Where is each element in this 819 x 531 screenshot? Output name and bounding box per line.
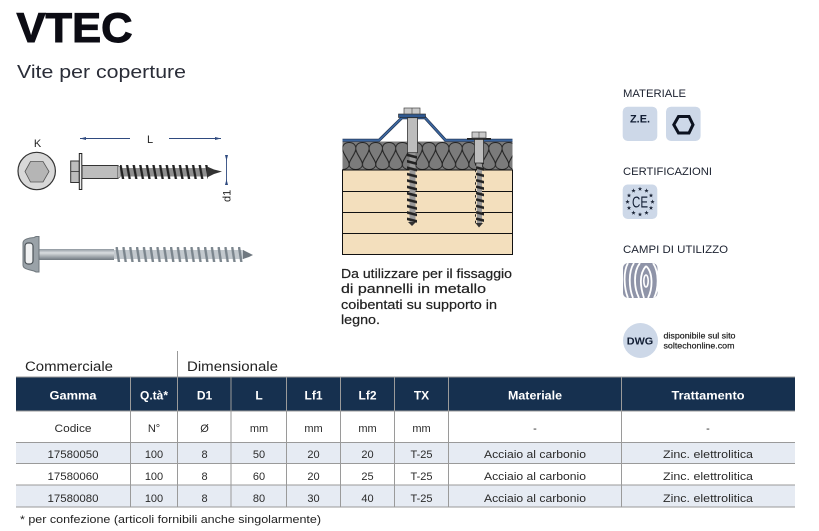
table header: Materiale (508, 388, 562, 402)
screw photo (23, 236, 253, 272)
row 17580080: 100 (145, 493, 163, 505)
row 17580060: T-25 (410, 471, 433, 483)
footnote: * per confezione (articoli fornibili anche singolarmente) (20, 514, 321, 526)
icon: CE with stars: CE (632, 194, 648, 212)
description text: Da utilizzare per il fissaggio (341, 267, 512, 281)
units row: Ø (200, 423, 209, 435)
table section headings (25, 351, 278, 377)
row 17580060: 25 (361, 471, 374, 483)
row 17580060: 8 (201, 471, 208, 483)
icon: hexagon (666, 107, 701, 141)
units row: - (533, 423, 537, 435)
row 17580060 (48, 471, 754, 483)
description text: legno. (341, 313, 380, 327)
application section diagram (342, 108, 512, 254)
row 17580050: 17580050 (48, 449, 98, 461)
units row: mm (358, 423, 377, 435)
units row: mm (250, 423, 268, 435)
section: materiale (623, 88, 701, 141)
row 17580060: 20 (307, 471, 320, 483)
title: VTEC (16, 4, 132, 51)
table section headings: Commerciale (25, 359, 113, 374)
DWG badge: DWG (627, 336, 653, 348)
icon: wood grain (623, 263, 658, 298)
table section headings: Dimensionale (187, 359, 278, 374)
row 17580080: 80 (253, 493, 265, 505)
row 17580050: 20 (307, 449, 320, 461)
table header: TX (414, 388, 429, 402)
row 17580050 (48, 449, 754, 461)
dimension L: L (147, 134, 153, 146)
row 17580050: T-25 (410, 449, 433, 461)
table header (16, 377, 795, 411)
row 17580060: 100 (145, 471, 163, 483)
insulation layer (342, 142, 512, 170)
units row: - (706, 423, 710, 435)
icon: Z.E.: Z.E. (630, 113, 650, 125)
row 17580050: Zinc. elettrolitica (663, 449, 754, 461)
row 17580050: 20 (361, 449, 374, 461)
side view of screw (71, 154, 222, 190)
description text: di pannelli in metallo (341, 282, 486, 296)
table header: Lf1 (304, 388, 323, 402)
section: certificazioni: CERTIFICAZIONI (623, 166, 712, 178)
section: campi di utilizzo (623, 244, 728, 298)
row 17580060: Zinc. elettrolitica (663, 471, 754, 483)
description text (341, 267, 512, 327)
row 17580080: 30 (307, 493, 320, 505)
table striped rows (16, 442, 795, 507)
row 17580050: 8 (201, 449, 208, 461)
section: campi di utilizzo: CAMPI DI UTILIZZO (623, 244, 728, 256)
fixing screw 1 (398, 108, 426, 226)
section: materiale: MATERIALE (623, 88, 686, 100)
table header: Q.tà* (140, 388, 168, 402)
units row (54, 423, 710, 435)
section: certificazioni (623, 166, 712, 219)
row 17580050: 100 (145, 449, 163, 461)
units row: N° (148, 423, 160, 435)
technical drawing: screw with dimensions (18, 134, 234, 202)
units row: mm (304, 423, 323, 435)
row 17580050: Acciaio al carbonio (484, 449, 586, 461)
row 17580060: 60 (253, 471, 265, 483)
table header: L (255, 388, 263, 402)
row 17580080 (48, 493, 754, 505)
head view with K label: K (34, 138, 42, 150)
DWG badge (623, 323, 736, 358)
row 17580060: Acciaio al carbonio (484, 471, 586, 483)
dimension L (80, 134, 221, 146)
metal panel (342, 118, 512, 140)
row 17580080: 17580080 (48, 493, 98, 505)
table header: Trattamento (672, 388, 744, 402)
row 17580080: Zinc. elettrolitica (663, 493, 754, 505)
row 17580080: 8 (201, 493, 208, 505)
row 17580080: Acciaio al carbonio (484, 493, 586, 505)
wood layers (342, 170, 512, 254)
row 17580050: 50 (253, 449, 265, 461)
DWG badge: disponibile sul sito (664, 331, 736, 340)
units row: mm (412, 423, 431, 435)
table header: D1 (197, 388, 212, 402)
dimension d1 (222, 155, 234, 202)
subtitle: Vite per coperture (17, 62, 186, 82)
row 17580080: T-25 (410, 493, 433, 505)
row 17580060: 17580060 (48, 471, 98, 483)
row 17580080: 40 (361, 493, 374, 505)
table header: Lf2 (358, 388, 377, 402)
units row: Codice (54, 423, 92, 435)
head view with K label (18, 138, 55, 190)
dimension d1: d1 (222, 190, 234, 202)
description text: coibentati su supporto in (341, 298, 497, 312)
table header: Gamma (50, 388, 97, 402)
fixing screw 2 (467, 132, 491, 228)
spec table (16, 377, 795, 507)
DWG badge: soltechonline.com (664, 342, 735, 350)
